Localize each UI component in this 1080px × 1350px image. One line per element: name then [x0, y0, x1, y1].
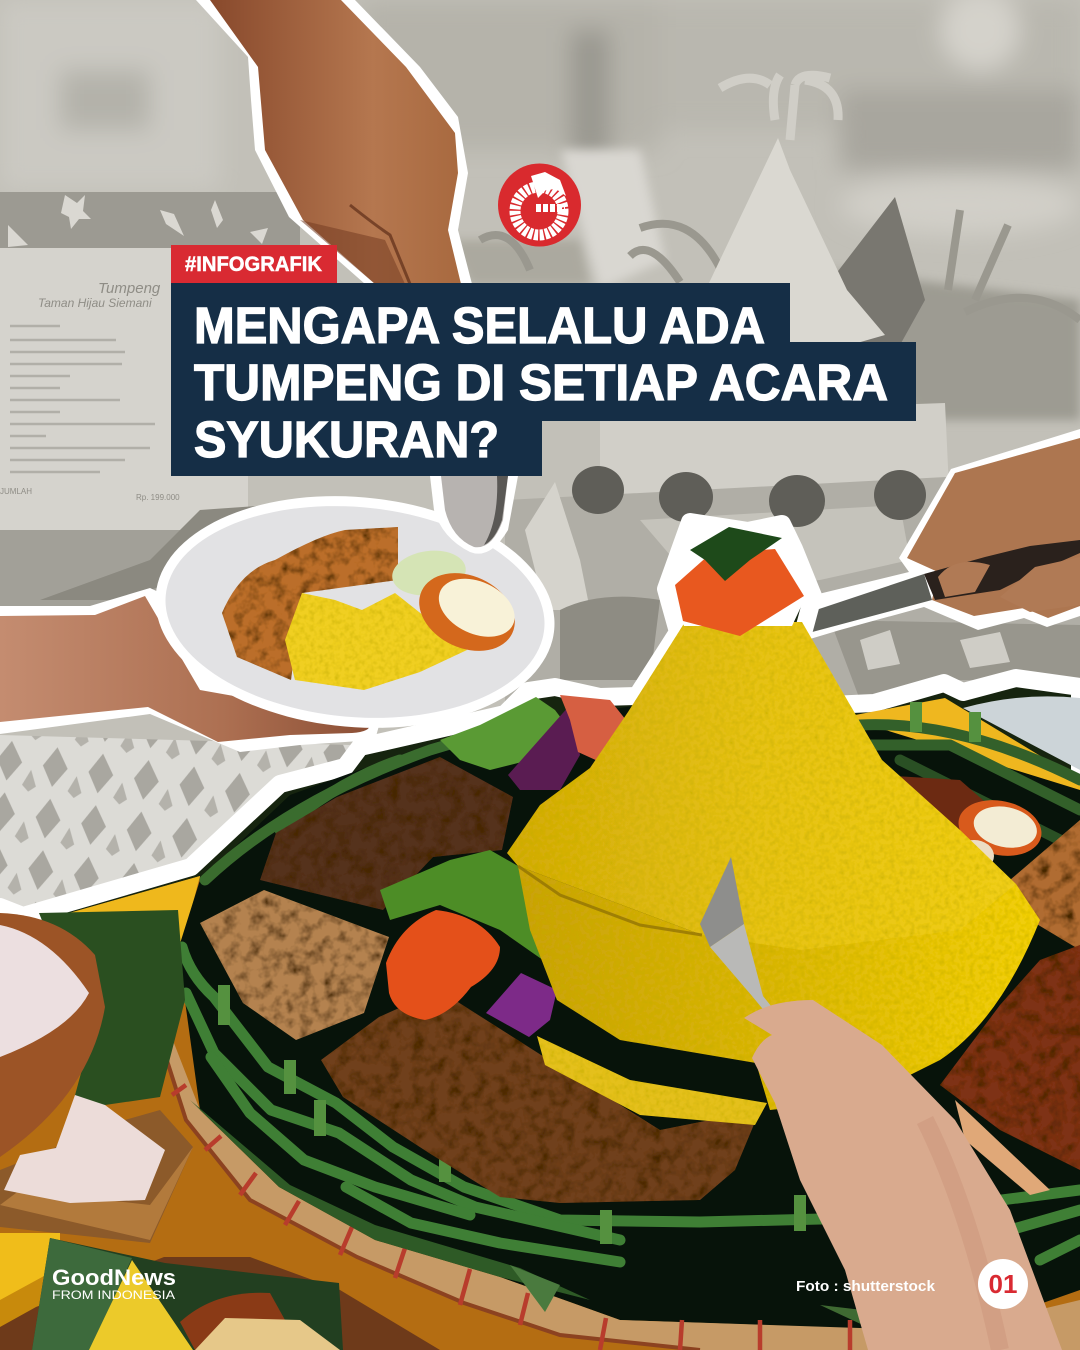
title block: TUMPENG DI SETIAP ACARA [194, 354, 888, 411]
bottom-left banana leaf and nasi [0, 1233, 440, 1350]
tag: #INFOGRAFIK: #INFOGRAFIK [185, 253, 322, 276]
GoodNews from Indonesia brand: FROM INDONESIA [52, 1288, 175, 1302]
hand from top with white outline [196, 0, 472, 284]
tomato slice [560, 695, 630, 762]
title block [171, 283, 916, 476]
title block: SYUKURAN? [194, 411, 499, 468]
GoodNews from Indonesia brand [52, 1265, 176, 1302]
fingers over handle [938, 557, 1080, 612]
plate [146, 480, 564, 744]
lower tier [518, 866, 1040, 1110]
upper cone [507, 622, 1016, 950]
cloth band [0, 192, 300, 250]
crochet doily [0, 735, 360, 925]
big woven tray [154, 702, 1080, 1350]
carrot rose [386, 910, 500, 1020]
tag: #INFOGRAFIK [171, 245, 337, 283]
fork [700, 857, 808, 1056]
lower grey band [0, 470, 1080, 720]
menu paper [0, 248, 248, 530]
page number badge [978, 1259, 1028, 1309]
photo credit: Foto : shutterstock [796, 1278, 936, 1295]
plants and cone [480, 210, 1080, 320]
GoodNews from Indonesia brand: GoodNews [52, 1265, 176, 1290]
purple cabbage lower [486, 973, 557, 1037]
greens lettuce top [440, 695, 630, 790]
bottom layer [537, 1036, 767, 1125]
cutting board with crackers [0, 1095, 193, 1243]
egg and sambal right [880, 775, 1080, 1195]
mixed vegetables urap [200, 890, 389, 1040]
arm [0, 596, 371, 742]
white outline around arm [0, 588, 380, 752]
table [0, 876, 1080, 1350]
title block: MENGAPA SELALU ADA [194, 297, 765, 354]
menu paper: Tumpeng [98, 280, 161, 297]
menu paper: Rp. 199.000 [136, 493, 180, 502]
fried chicken [321, 990, 760, 1203]
yellow rice [285, 593, 467, 690]
dark inner [178, 705, 1080, 1332]
plate with food held by left hand [0, 480, 564, 752]
menu paper: Taman Hijau Siemani [38, 296, 152, 310]
purple cabbage [508, 705, 580, 790]
spoon [430, 476, 518, 554]
cucumber [389, 546, 469, 600]
lettuce and parsley middle [380, 850, 550, 965]
tomato rose garnish with parsley [672, 527, 806, 636]
lettuce by bowl [39, 910, 185, 1110]
knife handle [924, 540, 1080, 600]
page number badge: 01 [989, 1269, 1017, 1299]
yellow rice tumpeng [507, 622, 1040, 1125]
bamboo tray rim [154, 1020, 1080, 1350]
plate top right [963, 696, 1080, 770]
main dish white outline and table [0, 522, 1080, 1350]
hand holding fork [744, 1000, 1062, 1350]
woven vines [182, 725, 1080, 1262]
table yellow right [850, 698, 1080, 860]
logo badge: GoodNews garuda [498, 164, 581, 246]
egg [406, 558, 528, 666]
rendang beef [260, 757, 513, 910]
wooden bowl with crackers [0, 913, 105, 1157]
hand with knife, right [782, 429, 1080, 645]
menu paper: JUMLAH [0, 487, 32, 496]
fried shallot and noodles [222, 527, 398, 680]
knife [783, 574, 932, 639]
banana leaf edges [190, 1100, 590, 1300]
tempeh orek [940, 945, 1080, 1170]
